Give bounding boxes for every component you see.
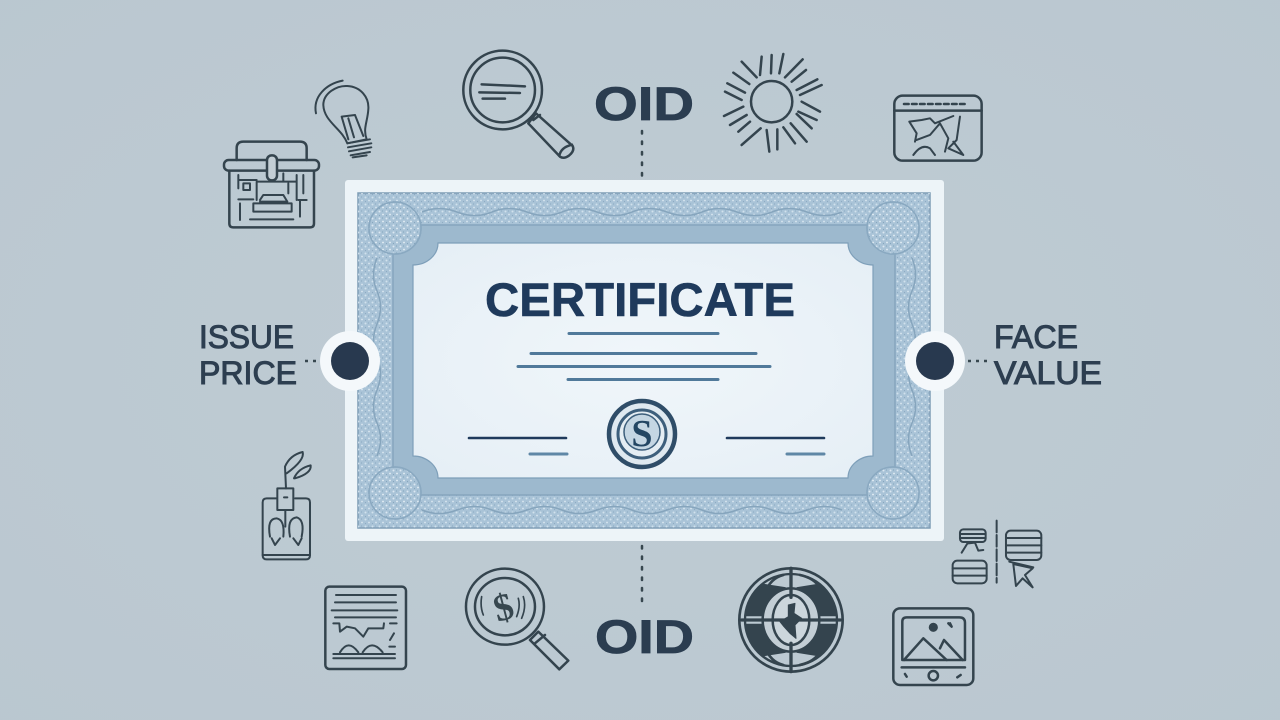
icon: sun <box>724 54 822 152</box>
icon: magnifying glass with dollar <box>466 569 568 669</box>
connector: face value dots <box>968 360 987 362</box>
icon: light bulb <box>315 81 371 157</box>
icon: magnifying glass with text <box>463 51 573 158</box>
icon: picture tablet <box>893 608 973 685</box>
label: OID top: OID <box>594 77 694 130</box>
signature line right <box>727 438 824 454</box>
label: issue price <box>199 319 297 391</box>
icon: browser window with map <box>894 96 982 161</box>
icon: tag with sprouts <box>263 452 311 559</box>
corner ornaments <box>369 202 919 519</box>
dollar seal <box>609 401 675 467</box>
connector: bottom dotted line <box>641 546 643 606</box>
heading: certificate: CERTIFICATE <box>485 273 795 326</box>
dollar seal: S <box>631 413 653 455</box>
ornate guilloche frame <box>358 193 930 528</box>
icon: toolbox machine <box>224 142 319 227</box>
label: issue price: PRICE <box>199 355 297 391</box>
panel: certificate <box>345 180 944 541</box>
label: face value: FACE <box>994 319 1078 355</box>
icon: magnifying glass with dollar: $ <box>489 585 518 631</box>
inner frame band <box>393 225 895 495</box>
text lines <box>518 334 770 380</box>
icon: ornate globe emblem <box>739 568 843 672</box>
connector: issue price dots <box>305 360 320 362</box>
icon: database and cursor <box>953 521 1041 587</box>
signature line left <box>469 438 567 454</box>
connector: top dotted line <box>641 131 643 178</box>
label: face value <box>994 319 1102 391</box>
certificate paper <box>345 180 944 541</box>
node: face value marker <box>905 331 965 391</box>
label: face value: VALUE <box>994 355 1102 391</box>
icon: report document <box>325 587 406 669</box>
label: issue price: ISSUE <box>199 319 294 355</box>
inner text panel <box>413 243 873 478</box>
label: OID bottom: OID <box>595 610 694 663</box>
node: issue price marker <box>320 331 380 391</box>
